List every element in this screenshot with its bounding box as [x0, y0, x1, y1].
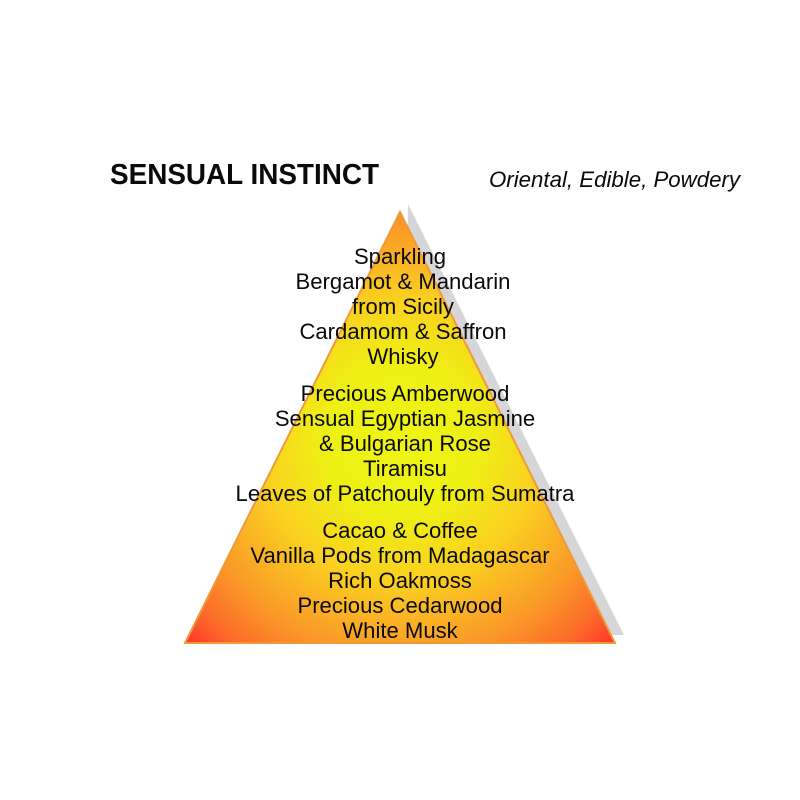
- base notes text: White Musk: [342, 618, 459, 643]
- top notes text: from Sicily: [352, 294, 454, 319]
- pyramid shadow: [400, 204, 624, 635]
- pyramid: [185, 212, 615, 643]
- base notes text: Precious Cedarwood: [297, 593, 503, 618]
- base notes text: Vanilla Pods from Madagascar: [250, 543, 550, 568]
- base notes text: Rich Oakmoss: [328, 568, 472, 593]
- top notes text: Bergamot & Mandarin: [296, 269, 510, 294]
- top notes text: Whisky: [367, 344, 439, 369]
- heart notes text: [236, 381, 575, 506]
- heart notes text: Precious Amberwood: [301, 381, 509, 406]
- heart notes text: Sensual Egyptian Jasmine: [275, 406, 535, 431]
- base notes text: [250, 518, 550, 643]
- base notes text: Cacao & Coffee: [322, 518, 478, 543]
- heart notes text: Leaves of Patchouly from Sumatra: [236, 481, 575, 506]
- heart notes text: Tiramisu: [363, 456, 447, 481]
- top notes text: [296, 244, 510, 369]
- top notes text: Cardamom & Saffron: [299, 319, 507, 344]
- heart notes text: & Bulgarian Rose: [319, 431, 491, 456]
- title: SENSUAL INSTINCT: [110, 159, 379, 191]
- subtitle: Oriental, Edible, Powdery: [489, 167, 742, 192]
- top notes text: Sparkling: [354, 244, 446, 269]
